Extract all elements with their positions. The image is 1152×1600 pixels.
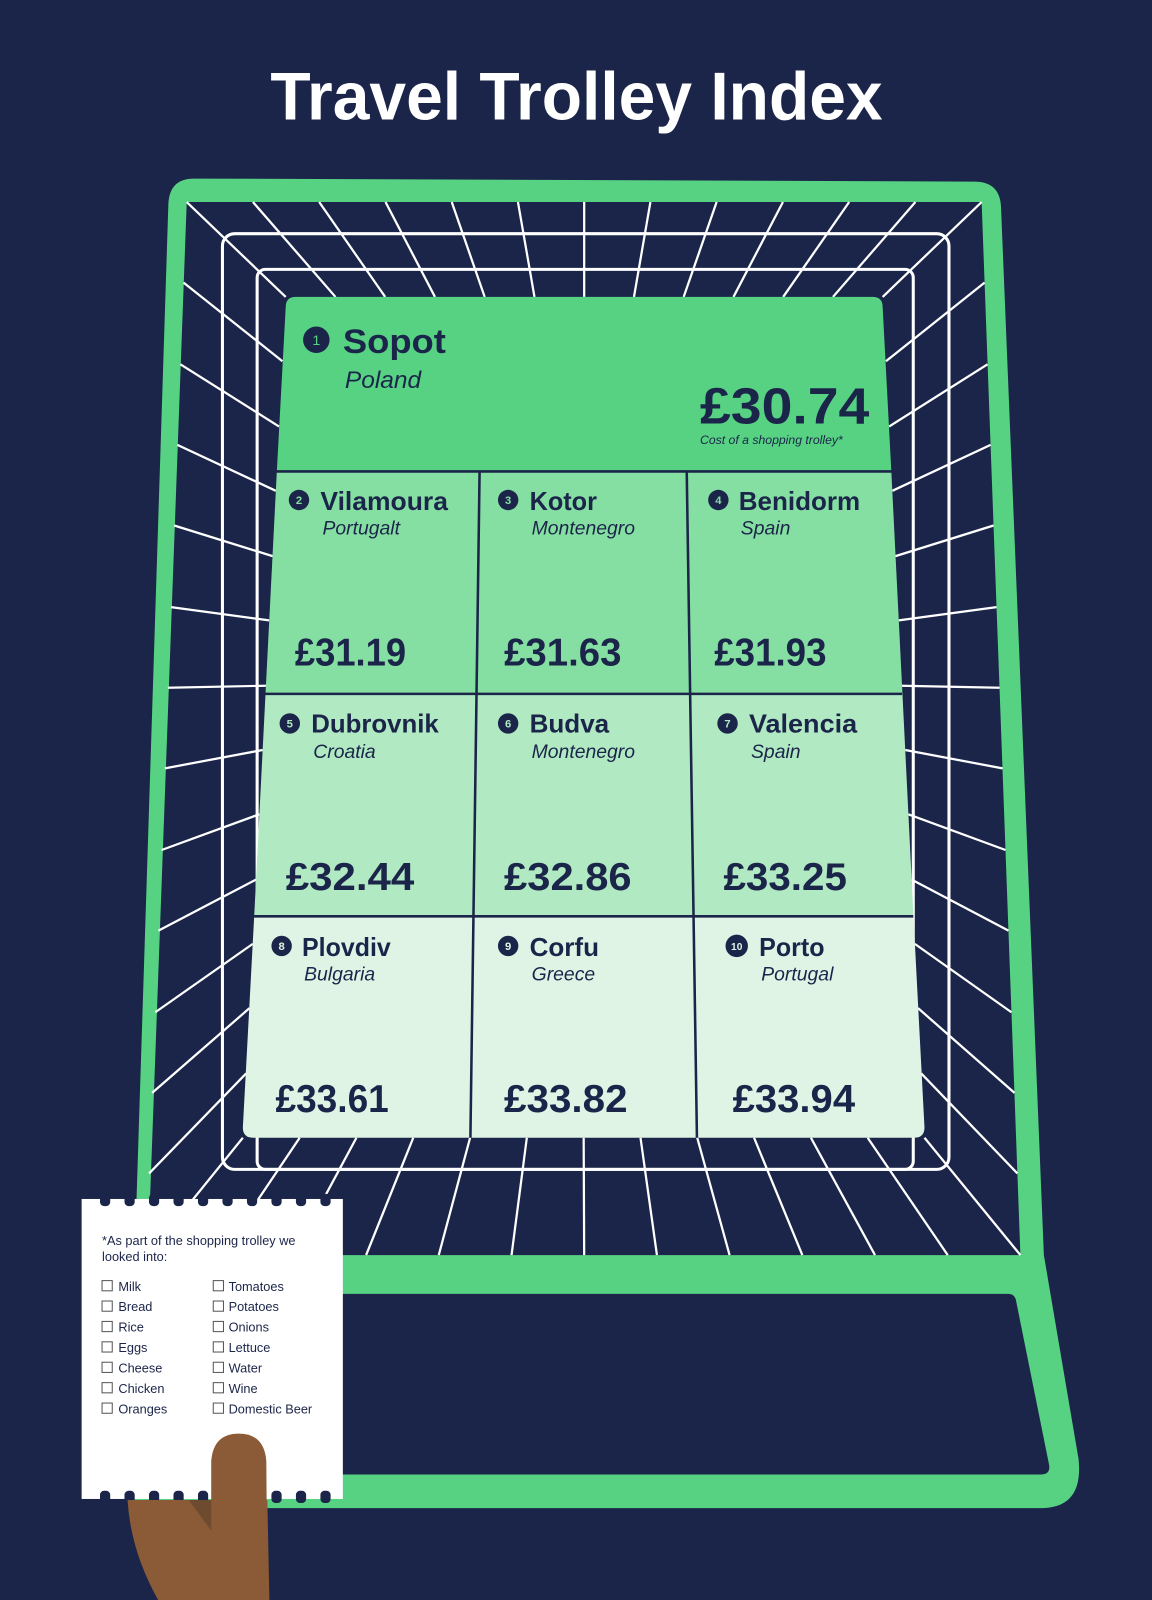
cells row 3: Budva: [530, 711, 610, 739]
cells row 4: Plovdiv: [302, 934, 392, 962]
row 1: Sopot: [277, 297, 891, 471]
receipt: Wine: [229, 1381, 258, 1396]
cells row 3: £33.25: [723, 856, 847, 899]
cells row 2: £31.93: [714, 631, 827, 674]
receipt: Potatoes: [229, 1299, 279, 1314]
cells row 3: 7: [724, 719, 731, 731]
cells row 2: £31.63: [504, 631, 621, 674]
cells row 2: Kotor: [530, 488, 597, 516]
receipt: Bread: [118, 1299, 152, 1314]
row 1: Sopot: Cost of a shopping trolley*: [700, 433, 844, 447]
row 1: Sopot: £30.74: [700, 377, 870, 434]
cells row 2: 3: [505, 495, 511, 507]
cells row 2: Vilamoura: [320, 488, 449, 516]
receipt: Tomatoes: [229, 1279, 284, 1294]
title: Travel Trolley Index: [270, 59, 883, 134]
cells row 4: Porto: [759, 934, 824, 962]
cells row 4: 8: [279, 941, 285, 953]
cells row 3: [280, 711, 858, 899]
receipt: Lettuce: [229, 1340, 270, 1355]
trolley frame: [128, 179, 1079, 1508]
row 1: Sopot: 1: [312, 333, 320, 349]
row 2: [243, 471, 924, 1138]
cells row 2: £31.19: [295, 631, 406, 674]
ranking card: [243, 297, 924, 1138]
cells row 3: £32.44: [286, 856, 415, 899]
receipt: Onions: [229, 1320, 269, 1335]
cells row 2: Spain: [741, 518, 790, 540]
cells row 4: Bulgaria: [304, 964, 375, 986]
cells row 3: Croatia: [313, 741, 376, 763]
receipt: Domestic Beer: [229, 1401, 313, 1416]
cells row 4: £33.61: [276, 1078, 389, 1121]
receipt: *As part of the shopping trolley we: [102, 1233, 296, 1248]
cells row 3: £32.86: [504, 856, 632, 899]
cells row 4: Portugal: [761, 964, 834, 986]
cells row 4: 9: [505, 941, 511, 953]
receipt: Rice: [118, 1320, 144, 1335]
row 1: Sopot: Sopot: [343, 323, 446, 361]
cells row 3: Spain: [751, 741, 801, 763]
cells row 3: 6: [505, 719, 511, 731]
receipt: Chicken: [118, 1381, 164, 1396]
wire cage grid: [148, 202, 1020, 1255]
cells row 2: Benidorm: [739, 488, 860, 516]
row 1: Sopot: Poland: [345, 367, 422, 394]
cells row 2: 2: [296, 495, 302, 507]
cells row 2: [289, 488, 860, 674]
cells row 3: Montenegro: [532, 741, 635, 763]
cells row 4: Greece: [532, 964, 595, 986]
cells row 4: £33.82: [504, 1078, 628, 1121]
cells row 3: Valencia: [749, 711, 858, 739]
icon: hand holding receipt: [128, 1434, 269, 1600]
cells row 4: 10: [731, 942, 743, 953]
cells row 4: £33.94: [733, 1078, 856, 1121]
cells row 2: 4: [715, 495, 722, 507]
receipt: Cheese: [118, 1360, 162, 1375]
receipt: looked into:: [102, 1249, 167, 1264]
cells row 3: 5: [287, 719, 293, 731]
cells row 4: [271, 934, 856, 1121]
cells row 4: Corfu: [530, 934, 599, 962]
cells row 3: Dubrovnik: [311, 711, 440, 739]
receipt: Eggs: [118, 1340, 147, 1355]
receipt: Milk: [118, 1279, 142, 1294]
receipt: [82, 1194, 343, 1503]
cells row 2: Montenegro: [532, 518, 635, 540]
cells row 2: Portugalt: [322, 518, 402, 540]
receipt: Oranges: [118, 1401, 167, 1416]
receipt: Water: [229, 1360, 263, 1375]
